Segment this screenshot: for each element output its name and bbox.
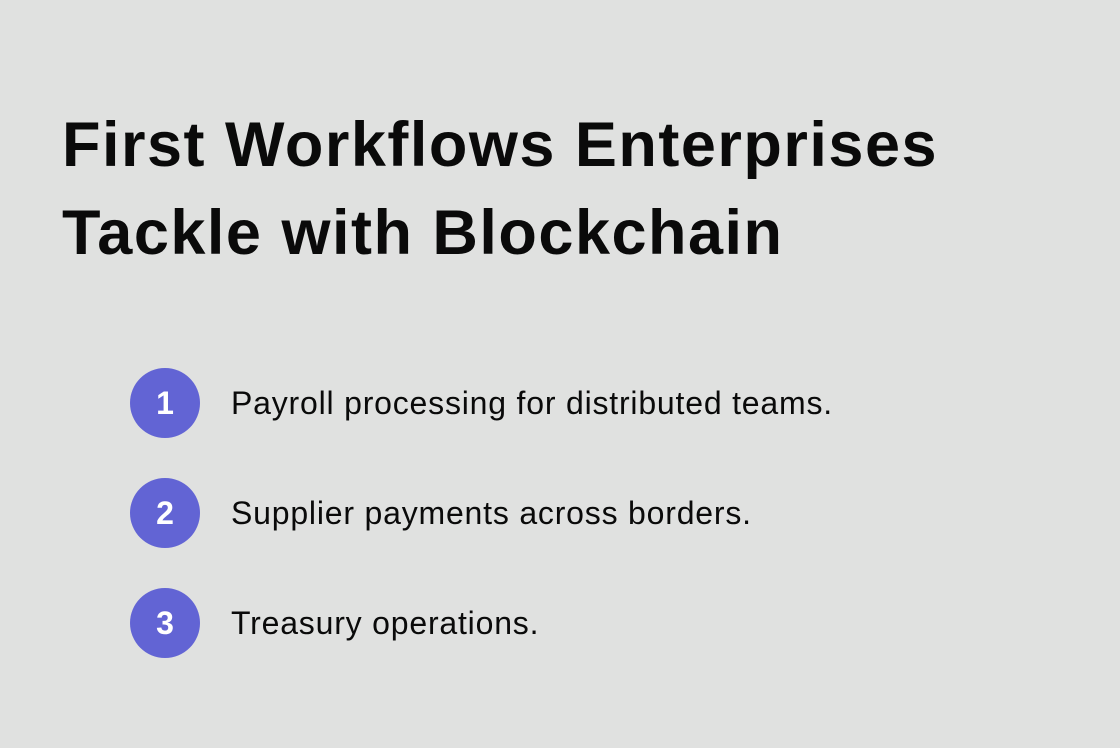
text 2: Supplier payments across borders.: [231, 495, 752, 531]
badge 1: [130, 368, 200, 438]
badge 1: 1: [156, 385, 174, 421]
badge 3: [130, 588, 200, 658]
list item 1: [130, 368, 833, 438]
title: Tackle with Blockchain: [62, 198, 784, 268]
badge 2: 2: [156, 495, 174, 531]
title: [62, 110, 938, 268]
list item 3: [130, 588, 539, 658]
text 3: Treasury operations.: [231, 605, 539, 641]
text 1: Payroll processing for distributed teams.: [231, 385, 833, 421]
list item 2: [130, 478, 752, 548]
badge 3: 3: [156, 605, 174, 641]
title: First Workflows Enterprises: [62, 110, 938, 180]
badge 2: [130, 478, 200, 548]
